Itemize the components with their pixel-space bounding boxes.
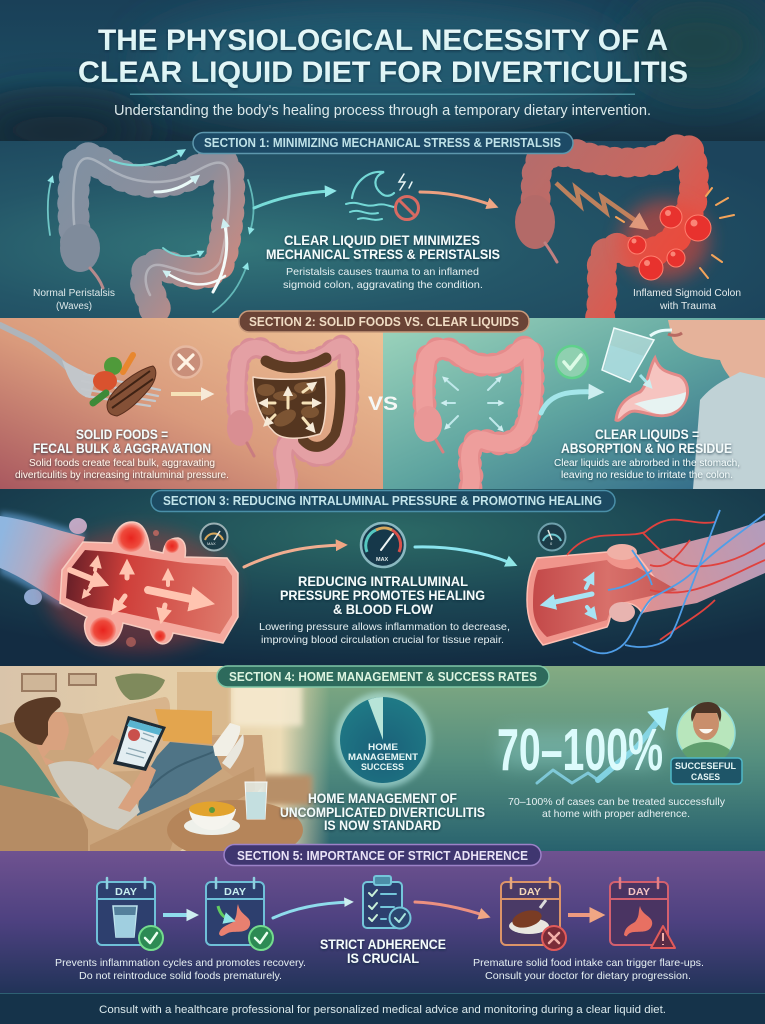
icon: small high gauge: MAX xyxy=(207,541,216,546)
arrow: to warning path xyxy=(415,902,486,916)
icon: small low gauge xyxy=(538,524,566,550)
text: solid foods body: Solid foods create fecal bulk, aggravating xyxy=(29,458,215,469)
illustration: room backdrop xyxy=(22,672,312,805)
label: inflamed sigmoid: Inflamed Sigmoid Colon xyxy=(633,288,741,299)
section pill 5: SECTION 5: IMPORTANCE OF STRICT ADHERENCE xyxy=(237,849,528,863)
heading: section 4 xyxy=(280,791,485,833)
icon: wave with prohibition sign xyxy=(346,172,418,220)
section pill 2 xyxy=(239,311,529,332)
heading: section 1 xyxy=(266,233,500,262)
icon: day 1 glass calendar xyxy=(97,878,163,950)
text: solid foods body: diverticulitis by increasing intraluminal pressure. xyxy=(15,470,229,481)
text: section 4 body: 70–100% of cases can be treated successfully xyxy=(508,796,726,808)
section pill 3 xyxy=(151,490,615,512)
title divider xyxy=(130,94,635,95)
icon: pressure gauge: MAX xyxy=(376,557,389,563)
icon: day 4 warning calendar: DAY xyxy=(628,887,650,898)
icon: soup bowl xyxy=(184,802,240,835)
heading: section 3: PRESSURE PROMOTES HEALING xyxy=(280,588,485,603)
text: section 1 body xyxy=(283,266,483,291)
text: prevents inflammation: Prevents inflammation cycles and promotes recovery. xyxy=(55,957,306,969)
heading: clear liquids: CLEAR LIQUIDS = xyxy=(595,427,699,442)
illustration: patient reading tablet xyxy=(14,697,244,830)
subtitle: Understanding the body's healing process through a temporary dietary intervention. xyxy=(114,103,651,119)
arrows: outward pressure xyxy=(70,560,205,618)
heading: clear liquids xyxy=(561,427,732,456)
section pill 2: SECTION 2: SOLID FOODS VS. CLEAR LIQUIDS xyxy=(249,315,519,329)
icon: pressure gauge xyxy=(361,523,405,567)
icon: small high gauge xyxy=(200,524,228,550)
icon: fork with steak and vegetables xyxy=(0,325,160,416)
panel: section 3 intraluminal pressure xyxy=(0,489,765,666)
arrow: orange to inflamed colon xyxy=(420,192,494,206)
heading: section 3: REDUCING INTRALUMINAL xyxy=(298,574,468,589)
icon: day 4 warning calendar xyxy=(610,878,675,948)
heading: strict adherence xyxy=(320,937,446,966)
section pill 4: SECTION 4: HOME MANAGEMENT & SUCCESS RATES xyxy=(229,670,537,684)
arrow: into stomach xyxy=(640,375,650,386)
illustration: person drinking xyxy=(668,320,765,489)
stat: success rate: 70–100% xyxy=(497,717,663,783)
text: clear liquids body xyxy=(554,458,740,481)
text: clear liquids body: leaving no residue to irritate the colon. xyxy=(561,470,733,481)
text: premature food warning xyxy=(473,957,704,982)
heading: strict adherence: STRICT ADHERENCE xyxy=(320,937,446,952)
panel: section 5 strict adherence xyxy=(0,851,765,993)
accents: inflammation sparks xyxy=(616,188,734,278)
icon: water glass xyxy=(245,782,267,819)
section pill 5 xyxy=(224,844,541,866)
heading: section 4: UNCOMPLICATED DIVERTICULITIS xyxy=(280,805,485,820)
badge: successful cases xyxy=(671,758,742,784)
text: section 1 body: sigmoid colon, aggravating the condition. xyxy=(283,279,483,291)
illustration: sofa xyxy=(0,697,266,851)
text: section 4 body xyxy=(508,796,726,820)
icon: day 3 steak calendar: DAY xyxy=(519,887,541,898)
label: normal peristalsis: Normal Peristalsis xyxy=(33,288,115,299)
icon: checklist clipboard xyxy=(363,876,410,928)
arrows: reduced pressure xyxy=(546,576,594,616)
label: normal peristalsis: (Waves) xyxy=(56,301,92,312)
arrow: liquids to absorption xyxy=(541,392,598,413)
chart: rising trend arrow xyxy=(537,708,668,783)
heading: clear liquids: ABSORPTION & NO RESIDUE xyxy=(561,441,732,456)
icon: day 2 stomach calendar xyxy=(206,878,273,950)
arrow: teal to wave icon xyxy=(254,191,332,208)
text: prevents inflammation xyxy=(55,957,306,982)
illustration: normal colon with peristalsis waves xyxy=(60,158,229,320)
icon: glass of water xyxy=(602,328,672,382)
heading: section 1: MECHANICAL STRESS & PERISTALSIS xyxy=(266,247,500,262)
illustration: colon full of fecal bulk xyxy=(227,346,349,489)
label: pie text: SUCCESS xyxy=(361,762,404,773)
title: CLEAR LIQUID DIET FOR DIVERTICULITIS xyxy=(78,56,688,89)
illustration: healing tube with blood vessels xyxy=(527,510,765,653)
stat glow: success rate xyxy=(500,730,660,768)
arrows: peristalsis waves xyxy=(48,151,254,312)
label: pie text: MANAGEMENT xyxy=(348,752,418,763)
section pill 4 xyxy=(217,666,549,687)
section pill 1: SECTION 1: MINIMIZING MECHANICAL STRESS & PERISTALSIS xyxy=(204,136,561,150)
illustration: orange pillow xyxy=(155,709,212,744)
section pill 1 xyxy=(193,132,573,154)
arrow: pressure relief xyxy=(415,547,513,564)
footer: Consult with a healthcare professional for personalized medical advice and monitoring during a clear liquid diet. xyxy=(99,1004,666,1016)
label: pie text xyxy=(348,742,418,773)
header background xyxy=(0,0,765,160)
text: premature food warning: Consult your doctor for dietary progression. xyxy=(485,970,691,982)
heading: section 4: IS NOW STANDARD xyxy=(324,818,441,833)
arrows: pressure inside bulk xyxy=(262,384,318,430)
footer xyxy=(0,993,765,1024)
panel: section 4 home management xyxy=(0,666,765,860)
text: section 3 body: improving blood circulation crucial for tissue repair. xyxy=(261,634,504,646)
heading: strict adherence: IS CRUCIAL xyxy=(347,951,419,966)
arrow: day 1 to day 2 xyxy=(163,913,194,917)
label: normal peristalsis xyxy=(33,288,115,312)
icon: day 1 glass calendar: DAY xyxy=(115,887,137,898)
illustration: inflamed colon xyxy=(515,148,709,322)
icon: day 3 steak calendar xyxy=(501,878,566,950)
icon group: inflamed diverticula xyxy=(628,206,711,280)
badge: successful cases: CASES xyxy=(691,772,720,783)
text: premature food warning: Premature solid food intake can trigger flare-ups. xyxy=(473,957,704,969)
text: clear liquids body: Clear liquids are abrorbed in the stomach, xyxy=(554,458,740,469)
arrow: food to colon xyxy=(171,392,209,396)
label: inflamed sigmoid xyxy=(633,288,741,312)
panel: section 2 clear liquids xyxy=(383,318,765,489)
panel: section 2 solid foods xyxy=(0,318,383,489)
title: THE PHYSIOLOGICAL NECESSITY OF A xyxy=(98,24,668,57)
icon: check mark xyxy=(556,346,588,378)
label: pie text: HOME xyxy=(368,742,398,753)
arrows: gentle pressure xyxy=(443,378,502,430)
arrow: day 3 to day 4 xyxy=(568,913,599,917)
badge: successful cases: SUCCESEFUL xyxy=(675,761,736,772)
heading: section 3 xyxy=(280,574,485,617)
heading: section 3: & BLOOD FLOW xyxy=(333,602,433,617)
illustration: stomach xyxy=(616,358,688,420)
text: section 4 body: at home with proper adherence. xyxy=(542,808,690,820)
icon: x mark xyxy=(170,346,202,378)
title xyxy=(78,24,688,89)
VS label: VS xyxy=(368,394,398,415)
heading: solid foods: SOLID FOODS = xyxy=(76,427,168,442)
panel: section 1 peristalsis xyxy=(0,141,765,322)
arrow: pressure reduction xyxy=(244,545,343,567)
text: section 3 body: Lowering pressure allows inflammation to decrease, xyxy=(259,621,510,633)
text: section 3 body xyxy=(259,621,510,646)
illustration: teal pillow xyxy=(0,732,60,798)
illustration: high pressure tube xyxy=(0,512,238,652)
section pill 3: SECTION 3: REDUCING INTRALUMINAL PRESSURE & PROMOTING HEALING xyxy=(163,494,602,508)
illustration: side table xyxy=(167,800,303,860)
arrow: jagged trauma bolt xyxy=(556,183,643,226)
illustration: clean colon xyxy=(414,347,533,489)
heading: section 4: HOME MANAGEMENT OF xyxy=(308,791,457,806)
text: prevents inflammation: Do not reintroduce solid foods prematurely. xyxy=(79,970,282,982)
icon: day 2 stomach calendar: DAY xyxy=(224,887,246,898)
icon: small low gauge: 0 xyxy=(550,541,553,546)
heading: solid foods xyxy=(33,427,211,456)
heading: solid foods: FECAL BULK & AGGRAVATION xyxy=(33,441,211,456)
arrow: to clipboard xyxy=(273,902,350,918)
chart: home management pie xyxy=(335,692,431,788)
text: solid foods body xyxy=(15,458,229,481)
label: inflamed sigmoid: with Trauma xyxy=(659,301,716,312)
text: section 1 body: Peristalsis causes trauma to an inflamed xyxy=(286,266,479,278)
icon: smiling patient avatar xyxy=(677,702,735,762)
heading: section 1: CLEAR LIQUID DIET MINIMIZES xyxy=(284,233,480,248)
